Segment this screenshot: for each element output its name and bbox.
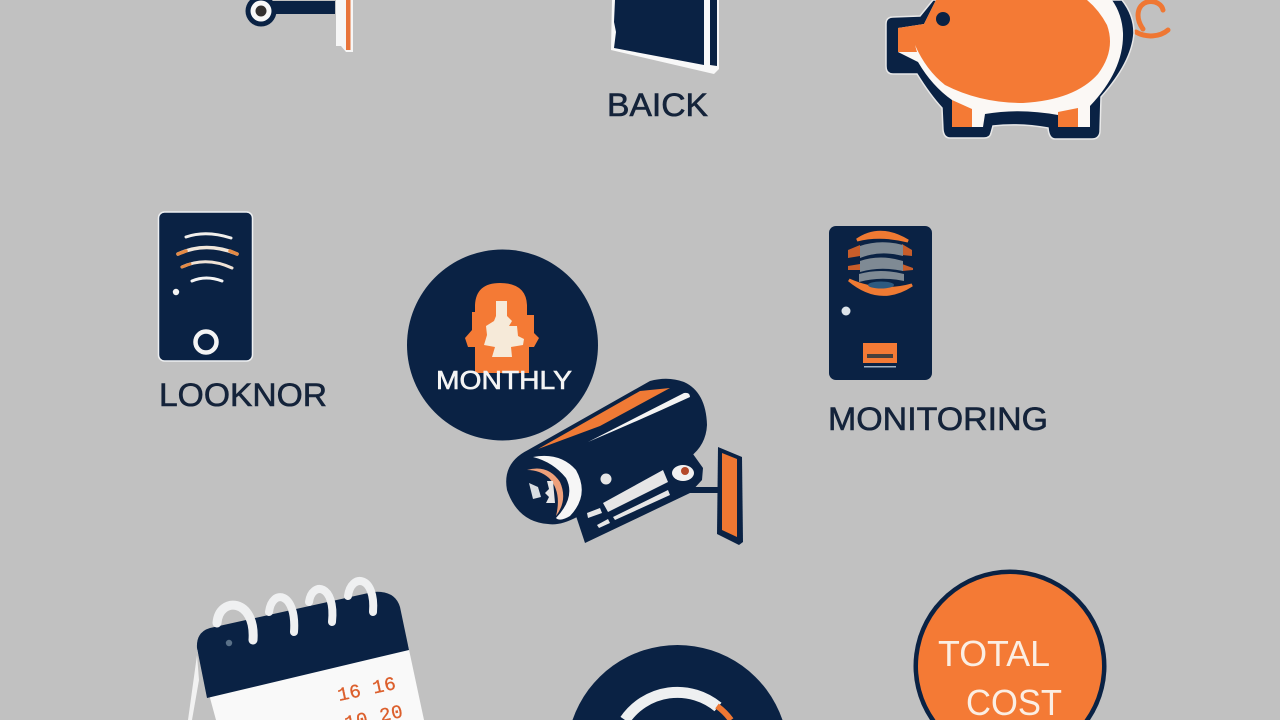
badge text: MONTHLY xyxy=(436,365,572,395)
icon: security camera xyxy=(506,379,743,545)
icon: calendar xyxy=(188,581,424,720)
pig eye xyxy=(936,12,950,26)
pig tail xyxy=(1136,2,1168,36)
monitoring orange arcs xyxy=(857,232,908,241)
pig orange belly xyxy=(898,0,1110,103)
gauge white arc xyxy=(625,692,718,720)
label: LOOKNOR: LOOKNOR xyxy=(159,377,327,413)
icon: wall bracket fragment xyxy=(246,0,353,52)
calendar binding rings xyxy=(217,605,253,640)
monitoring grey bands xyxy=(860,242,903,258)
gauge xyxy=(572,645,782,720)
label: BAICK: BAICK xyxy=(607,87,708,123)
calendar stand xyxy=(188,655,199,720)
label: MONITORING: MONITORING xyxy=(828,401,1048,437)
camera arm xyxy=(688,487,720,493)
signal arcs xyxy=(186,234,231,238)
pig outline xyxy=(886,0,1134,139)
calendar dates: 16 16 xyxy=(336,673,398,707)
calendar dates xyxy=(336,673,405,720)
pig legs xyxy=(952,100,972,127)
camera mount bracket xyxy=(717,447,743,545)
badge orange emblem xyxy=(465,283,539,373)
badge white glyph xyxy=(484,301,524,357)
camera white highlight xyxy=(588,393,690,442)
icon: book xyxy=(611,0,719,74)
badge: monthly xyxy=(407,250,598,440)
total cost text: TOTAL xyxy=(938,633,1050,674)
panel: left device xyxy=(158,212,252,361)
pig white body xyxy=(898,0,1123,127)
monitoring orange slot xyxy=(863,343,897,363)
badge: total cost xyxy=(914,570,1106,720)
camera underside tray xyxy=(574,454,703,543)
monitoring indicator light xyxy=(842,306,850,316)
icon: piggy bank xyxy=(886,0,1168,139)
camera joint xyxy=(668,456,700,488)
camera slots xyxy=(603,470,668,512)
calendar page xyxy=(197,645,424,720)
panel: monitoring device xyxy=(829,226,932,380)
camera lens crescent xyxy=(533,456,582,520)
camera orange stripe xyxy=(538,388,670,449)
gauge orange arc xyxy=(717,706,731,720)
calendar header xyxy=(197,592,409,698)
camera body xyxy=(506,379,707,524)
